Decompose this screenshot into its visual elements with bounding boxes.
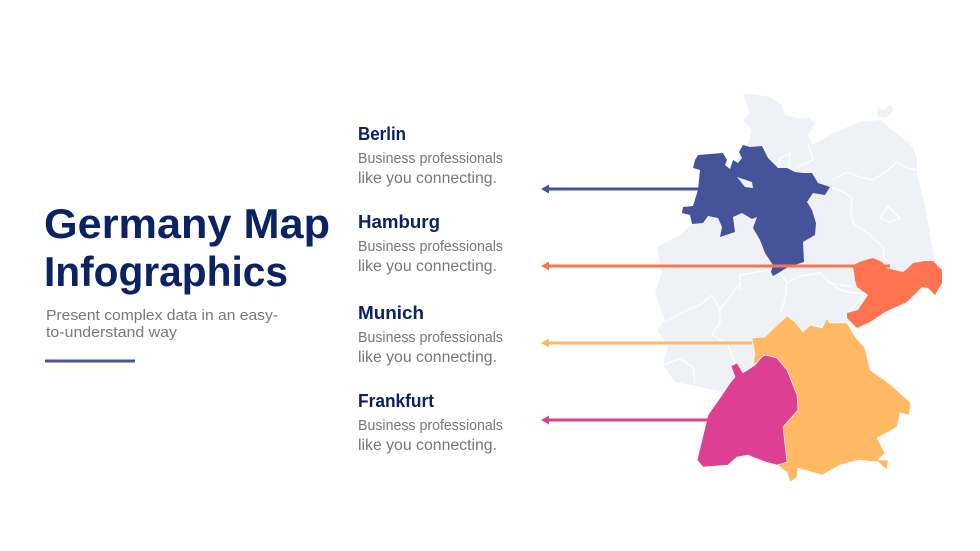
text block: Munich: like you connecting. (358, 349, 497, 366)
subtitle (46, 307, 278, 341)
text block: Berlin: like you connecting. (358, 170, 497, 187)
region: Lower Saxony (blue) (682, 145, 830, 276)
title: Infographics (44, 248, 288, 295)
text block: Frankfurt: Business professionals (358, 417, 503, 434)
title: Germany Map (44, 200, 330, 247)
base map of Germany (655, 93, 935, 392)
arrow: Frankfurt (541, 416, 708, 424)
arrow: Berlin (541, 184, 701, 194)
text block: Frankfurt: Frankfurt (358, 391, 434, 411)
region: Saxony (orange) (847, 258, 942, 328)
text block: Frankfurt (358, 391, 503, 454)
region: Baden-Wuerttemberg (pink) (697, 355, 798, 467)
text block: Hamburg (358, 212, 503, 275)
arrow: Munich (541, 338, 752, 348)
text block: Munich: Business professionals (358, 329, 503, 346)
subtitle: to-understand way (46, 324, 178, 341)
arrow: Hamburg (541, 262, 890, 270)
title underline (45, 360, 135, 362)
text block: Berlin: Berlin (358, 124, 406, 144)
text block: Hamburg: Business professionals (358, 238, 503, 255)
text block: Berlin (358, 124, 503, 187)
text block: Munich: Munich (358, 303, 424, 323)
text block: Berlin: Business professionals (358, 150, 503, 167)
subtitle: Present complex data in an easy- (46, 307, 278, 324)
text block: Hamburg: like you connecting. (358, 258, 497, 275)
text block: Hamburg: Hamburg (358, 212, 440, 232)
title (44, 200, 330, 295)
region: Bavaria (yellow) (752, 316, 911, 482)
text block: Munich (358, 303, 503, 366)
text block: Frankfurt: like you connecting. (358, 437, 497, 454)
